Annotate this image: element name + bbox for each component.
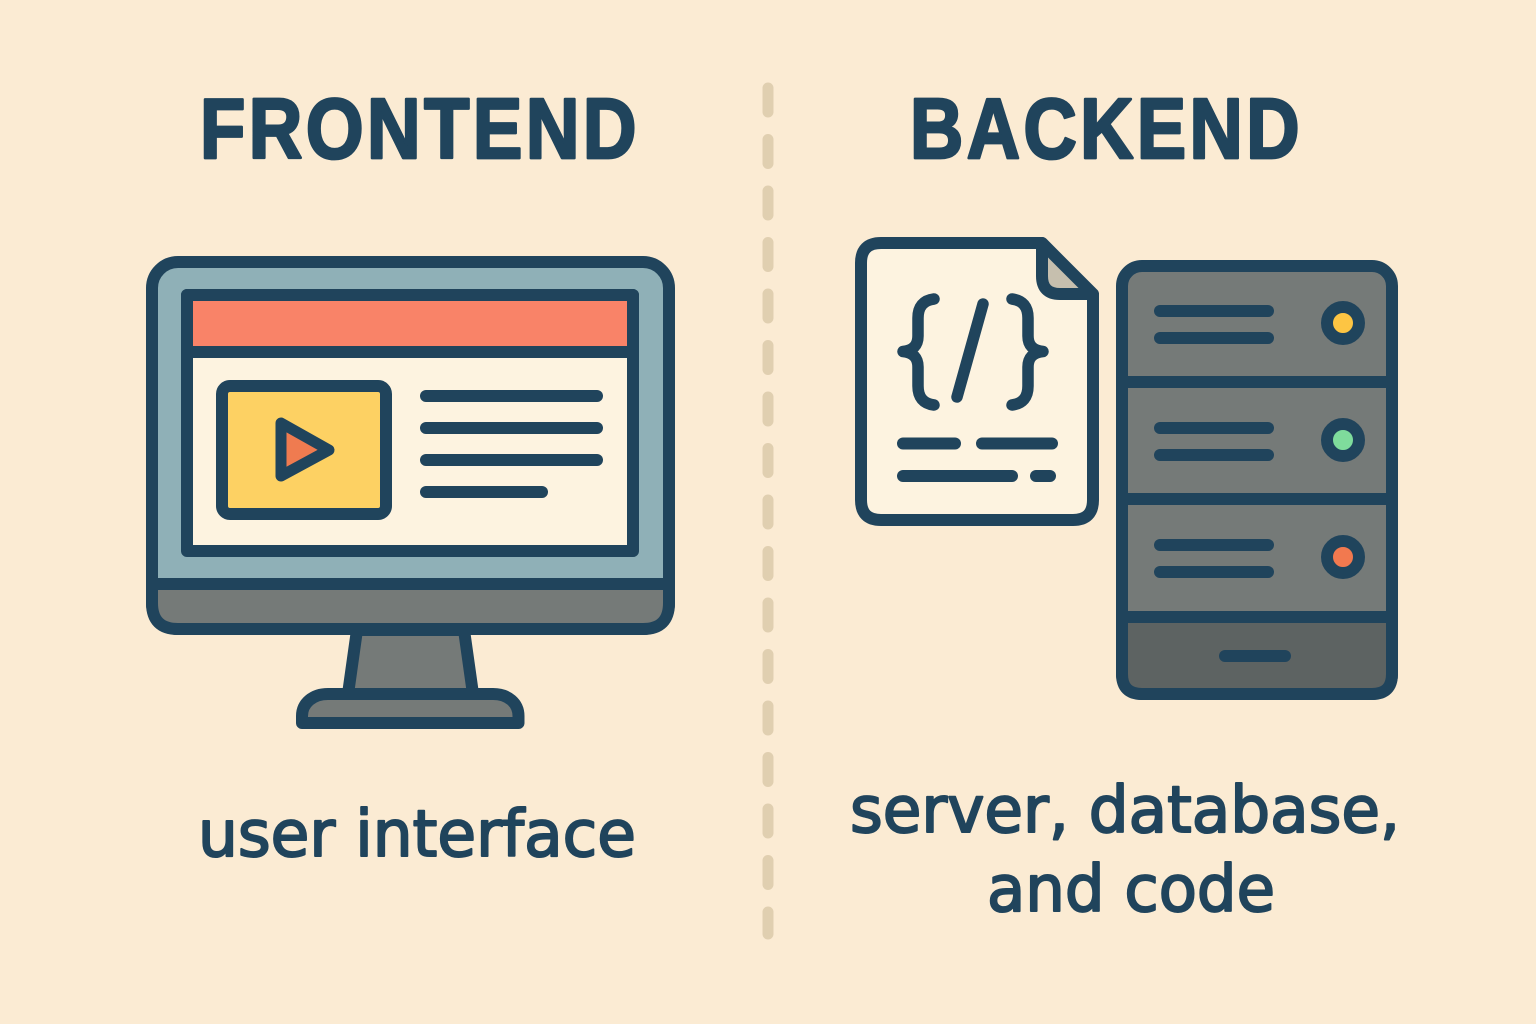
title: frontend: FRONTEND: [200, 82, 640, 177]
unit 1: [1160, 307, 1359, 339]
browser header: [187, 295, 633, 352]
caption: backend: server, database,: [850, 774, 1400, 848]
code lines: [903, 444, 1052, 476]
screen: [187, 295, 633, 551]
text lines: [426, 396, 597, 492]
video thumbnail: [222, 386, 386, 514]
rack bottom: [1122, 617, 1392, 694]
rack body: [1122, 266, 1392, 694]
left brace: [903, 299, 934, 405]
caption: backend: [850, 774, 1400, 927]
icon: monitor: [152, 262, 669, 723]
play icon: [281, 423, 329, 476]
caption: frontend: user interface: [198, 798, 636, 872]
page fold: [1042, 243, 1093, 294]
right brace: [1012, 299, 1043, 405]
rack dividers: [1122, 376, 1392, 388]
unit 2: [1160, 424, 1359, 456]
caption: backend: and code: [987, 853, 1275, 927]
monitor base: [302, 694, 518, 723]
monitor chin: [152, 584, 669, 629]
slash: [957, 304, 983, 397]
icon: code document: [861, 243, 1093, 520]
bottom slot: [1225, 650, 1285, 662]
monitor body: [152, 262, 669, 629]
divider: [762, 88, 774, 934]
icon: server rack: [1122, 266, 1392, 694]
monitor stand: [348, 630, 473, 694]
title: backend: BACKEND: [910, 82, 1303, 177]
unit 3: [1160, 541, 1359, 573]
page: [861, 243, 1093, 520]
